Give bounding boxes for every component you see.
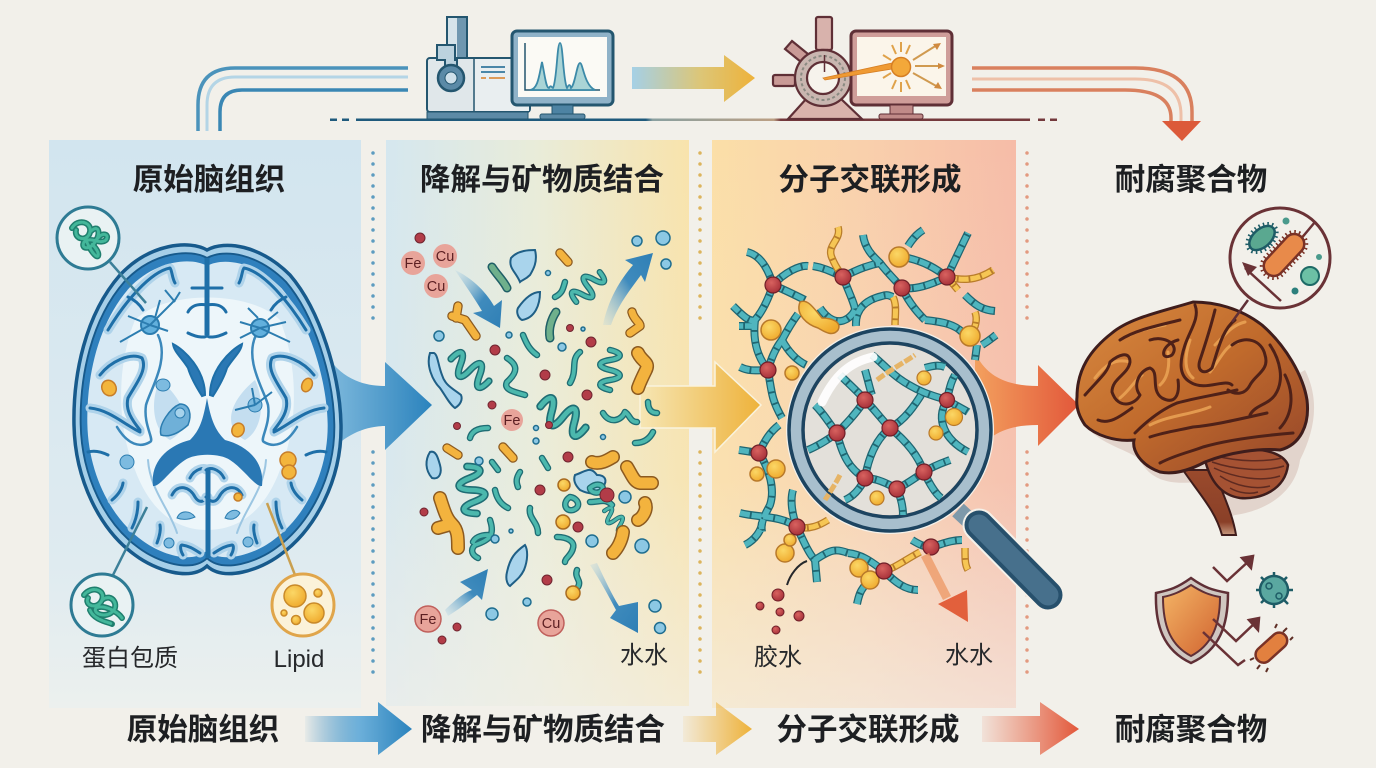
metal ion: Cu top bbox=[433, 244, 457, 268]
arrow: water release panel 3 bbox=[925, 555, 968, 622]
callout: lipid bbox=[267, 503, 334, 636]
metal ion: Fe top: Fe bbox=[405, 256, 421, 272]
panel: degradation and mineral binding bbox=[386, 140, 689, 706]
cells bbox=[161, 404, 190, 436]
callout: resistant to microbes bbox=[1230, 208, 1330, 322]
red nodes bbox=[751, 269, 955, 579]
arrow: water out bbox=[590, 563, 638, 633]
icon: green microbe bbox=[1256, 572, 1293, 608]
dark sulci bbox=[1085, 305, 1293, 463]
big arrow: yellow bbox=[640, 362, 761, 452]
metal ion: Cu lower: Cu bbox=[427, 279, 445, 295]
brain cross-section illustration bbox=[74, 245, 341, 574]
bottom label: degradation: 降解与矿物质结合 bbox=[421, 713, 665, 747]
panel: molecular crosslinking bbox=[712, 140, 1016, 708]
metal ion: Cu lower bbox=[424, 274, 448, 298]
small red particles bbox=[415, 233, 614, 644]
yellow nodes bbox=[750, 247, 980, 589]
central fissure bbox=[207, 258, 208, 558]
icon: shield bbox=[1156, 578, 1228, 663]
deep lobes shading bbox=[154, 380, 261, 440]
callout: protein bottom bbox=[71, 507, 147, 636]
label: glue: 胶水 bbox=[754, 644, 802, 671]
icon: chromatogram monitor bbox=[512, 31, 613, 119]
blue shard fragments bbox=[426, 250, 605, 586]
brain stem bbox=[1183, 470, 1236, 535]
heading: corrosion resistant polymer: 耐腐聚合物 bbox=[1115, 163, 1267, 197]
sulci: left hemisphere bbox=[88, 268, 208, 555]
callout: protein top bbox=[57, 207, 146, 303]
arrow: release up bbox=[603, 253, 653, 325]
metal ion: Fe centre bbox=[501, 409, 523, 431]
bottom label: polymer: 耐腐聚合物 bbox=[1115, 713, 1267, 747]
icon: orange microbe bbox=[1250, 624, 1293, 672]
bottom arrow: yellow bbox=[683, 702, 752, 755]
bottom label: original brain tissue: 原始脑组织 bbox=[127, 713, 279, 747]
metal ion: Fe bottom bbox=[415, 606, 441, 632]
yellow crosslinks bbox=[797, 227, 993, 571]
green bacterium bbox=[1242, 218, 1282, 258]
orange bacterium bbox=[1257, 227, 1311, 283]
heading: original brain tissue: 原始脑组织 bbox=[133, 163, 285, 197]
white matter shading bbox=[121, 298, 294, 530]
label: lipid: Lipid bbox=[274, 646, 324, 673]
dotted separators bbox=[373, 153, 1027, 680]
ventricles bbox=[173, 344, 205, 396]
lens bbox=[786, 326, 994, 534]
cerebrum bbox=[1077, 302, 1308, 473]
crosslinked network bbox=[733, 227, 996, 604]
degraded fragments field bbox=[415, 231, 671, 644]
metal ion: Fe top bbox=[401, 251, 425, 275]
label: protein: 蛋白包质 bbox=[82, 645, 178, 672]
middle arrow between instruments bbox=[632, 55, 755, 102]
big arrow: orange bbox=[975, 352, 1079, 460]
top process pipes: left (blue) bbox=[198, 68, 408, 131]
magnifier bbox=[786, 326, 1048, 595]
handle bbox=[958, 510, 985, 535]
bottom arrow: orange bbox=[982, 702, 1079, 755]
lipid blobs bbox=[438, 353, 652, 553]
label: water panel 2: 水水 bbox=[620, 642, 668, 669]
metal ion: Cu bottom bbox=[538, 610, 564, 636]
light gyri highlights bbox=[1095, 322, 1245, 425]
olive-teal fragments bbox=[492, 267, 556, 338]
sulci: right hemisphere bbox=[206, 268, 326, 555]
label: water panel 3: 水水 bbox=[945, 642, 993, 669]
neurons bbox=[141, 316, 159, 334]
big arrow: blue bbox=[330, 360, 432, 452]
baseline under instruments bbox=[330, 118, 1057, 121]
arrow: ions into fragments bbox=[455, 270, 502, 328]
preserved brain bbox=[1077, 302, 1314, 535]
heading: degradation: 降解与矿物质结合 bbox=[420, 163, 664, 197]
arrows deflected by shield bbox=[1203, 556, 1259, 665]
metal ion: Cu top: Cu bbox=[436, 249, 454, 265]
panel: original brain tissue bbox=[49, 140, 361, 708]
icon: diffraction monitor bbox=[823, 31, 952, 119]
metal ion: Fe bottom: Fe bbox=[420, 612, 436, 628]
top process pipes: right (red) with arrow bbox=[972, 68, 1201, 141]
lipid droplets bbox=[99, 377, 314, 501]
shadow bbox=[1085, 370, 1314, 516]
glue droplets bbox=[756, 561, 807, 634]
teal peptide coils bbox=[446, 266, 657, 587]
heading: crosslinking: 分子交联形成 bbox=[778, 163, 962, 197]
icon: mass spectrometer instrument bbox=[427, 17, 530, 119]
small blue particles bbox=[434, 231, 671, 634]
metal ion: Fe centre: Fe bbox=[504, 413, 520, 429]
bottom arrow: blue bbox=[305, 702, 412, 755]
metal ion: Cu bottom: Cu bbox=[542, 616, 560, 632]
bottom label: crosslinking: 分子交联形成 bbox=[776, 713, 960, 747]
cerebellum bbox=[1205, 449, 1288, 498]
icon: diffractometer instrument bbox=[773, 17, 862, 119]
arrow: ions bottom bbox=[445, 569, 488, 616]
